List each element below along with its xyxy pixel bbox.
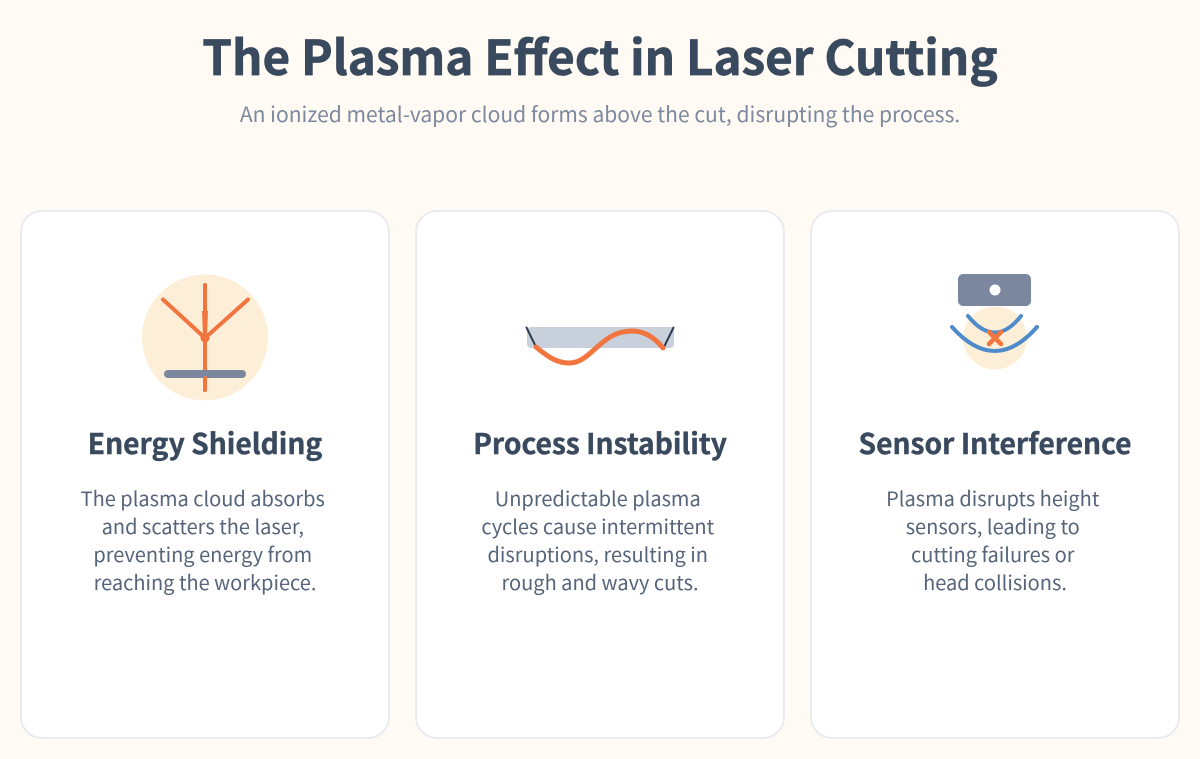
text: energy shielding description: preventing energy from: [93, 539, 312, 568]
text: process instability description: Unpredictable plasma: [495, 483, 701, 512]
text: energy shielding description: and scatters the laser,: [102, 511, 304, 540]
panel: energy shielding: [20, 210, 390, 739]
icon: height sensor with blocked signal: [950, 274, 1040, 370]
text: process instability description: [481, 483, 714, 596]
text: process instability description: rough and wavy cuts.: [501, 567, 699, 596]
icon: laser scattered by plasma cloud: [142, 274, 268, 400]
subtitle: An ionized metal-vapor cloud forms above the cut, disrupting the process.: [240, 99, 960, 129]
text: sensor interference description: cutting failures or: [911, 539, 1074, 568]
text: energy shielding description: [81, 483, 325, 596]
heading: process instability: Process Instability: [473, 422, 727, 463]
title: The Plasma Effect in Laser Cutting: [202, 20, 998, 89]
text: energy shielding description: The plasma cloud absorbs: [81, 483, 325, 512]
heading: sensor interference: Sensor Interference: [858, 422, 1132, 463]
text: process instability description: disruptions, resulting in: [488, 539, 708, 568]
text: sensor interference description: sensors, leading to: [906, 511, 1080, 540]
heading: energy shielding: Energy Shielding: [88, 422, 322, 463]
text: process instability description: cycles cause intermittent: [481, 511, 714, 540]
text: sensor interference description: [886, 483, 1100, 596]
text: energy shielding description: reaching the workpiece.: [94, 567, 316, 596]
panel: process instability: [415, 210, 785, 739]
panel: sensor interference: [810, 210, 1180, 739]
text: sensor interference description: head collisions.: [923, 567, 1067, 596]
icon: wavy cut through workpiece: [526, 326, 674, 366]
text: sensor interference description: Plasma disrupts height: [886, 483, 1099, 512]
